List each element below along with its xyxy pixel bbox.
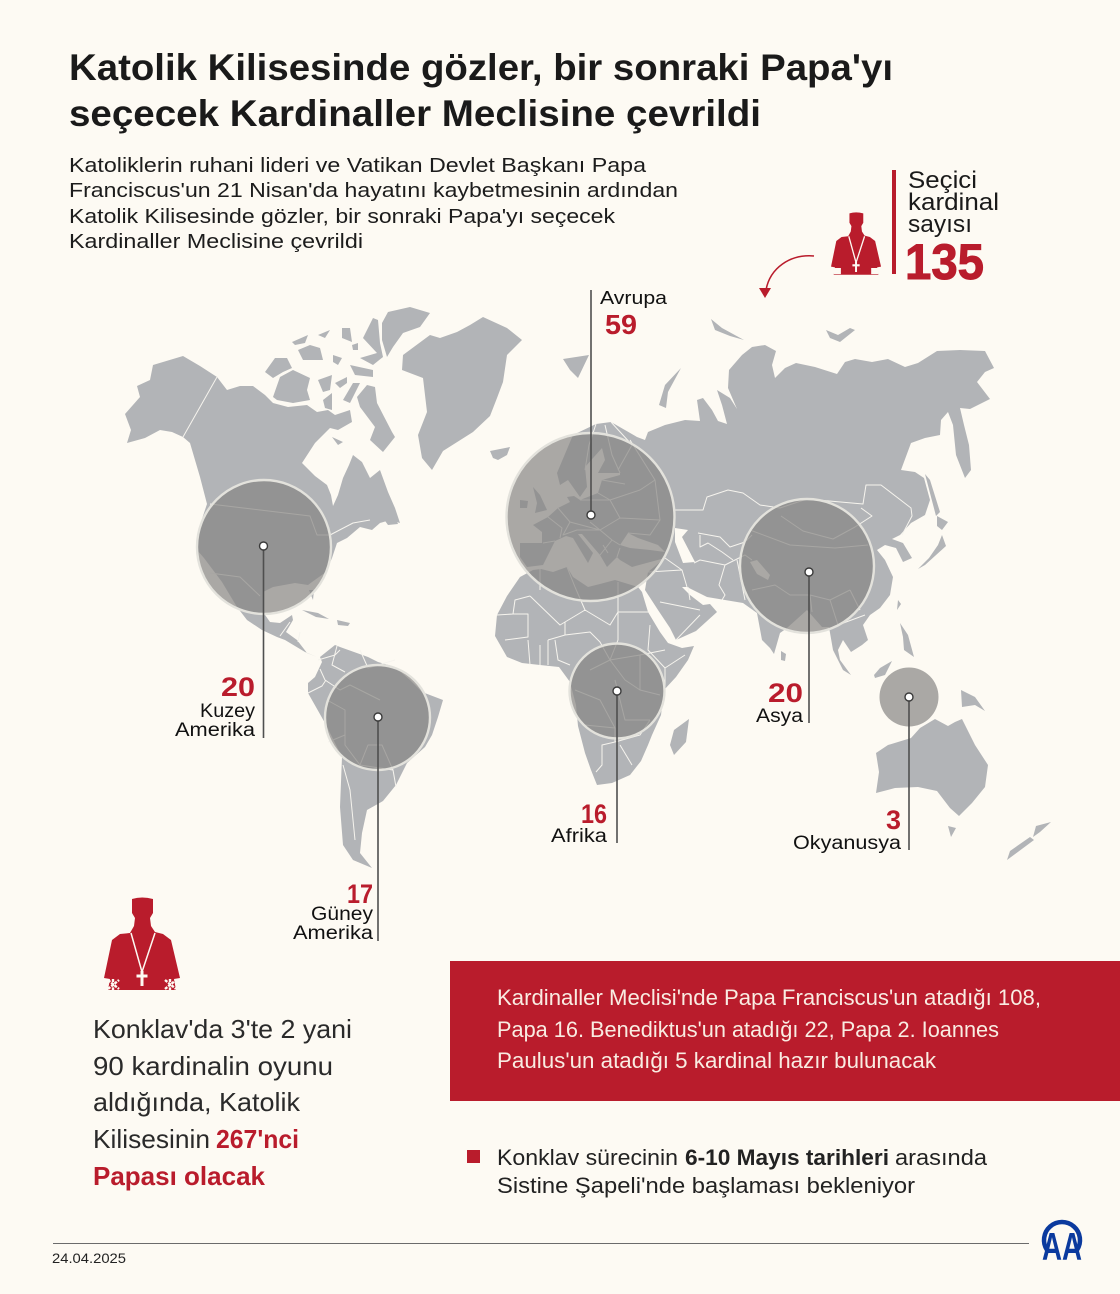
icon: cardinal, small [831,212,881,275]
text block: konklav two-thirds: Konklav'da 3'te 2 yani [93,1014,352,1044]
bubble: Avrupa [506,433,674,601]
landmass: South-East Asia islands [781,600,914,678]
inland seas [620,528,770,580]
landmass: northern Eurasian islands [563,319,855,408]
landmass: New Guinea, Tasmania and New Zealand [948,690,1051,860]
world map [125,307,1051,868]
total number: 135 [905,234,984,290]
label: Afrika 16 [551,687,621,847]
text block: konklav two-thirds: aldığında, Katolik [93,1087,301,1117]
bullet: conclave dates: Konklav sürecinin [497,1145,678,1170]
label: Kuzey Amerika 20 [175,542,268,741]
text block: konklav two-thirds [93,1014,352,1191]
heading text [908,167,999,238]
bullet: conclave dates: 6-10 Mayıs tarihleri [685,1145,889,1170]
panel: red box [450,961,1120,1101]
label: Avrupa 59: 59 [605,309,637,340]
bubble: Güney Amerika [325,665,430,770]
intro paragraph: Katoliklerin ruhani lideri ve Vatikan Devlet Başkanı Papa [69,154,647,177]
red divider bar [892,170,896,274]
label: Avrupa 59: Avrupa [600,287,668,308]
landmass: Caribbean islands and Florida [302,590,350,626]
landmass: Greenland [402,317,522,470]
label: Güney Amerika 17: Güney [311,904,374,925]
landmass: Australia [876,719,988,816]
Black Sea [620,533,665,552]
label: Avrupa 59 [587,287,668,519]
text block: konklav two-thirds: Kilisesinin [93,1124,210,1154]
bullet: conclave dates [467,1145,988,1198]
landmass: Africa [495,567,694,785]
landmass: Japan and Sakhalin [918,474,948,569]
landmass: Iceland [490,447,510,460]
logo: AA: AA [1042,1226,1082,1269]
country borders [183,377,912,840]
icon: cardinal, large [104,898,180,990]
landmass: Madagascar [670,719,689,755]
panel: continent bubbles [197,433,938,770]
panel: red box: Kardinaller Meclisi'nde Papa Franciscus'un atadığı 108, [497,985,1041,1010]
intro paragraph: Kardinaller Meclisine çevrildi [69,230,363,253]
text block: konklav two-thirds: 267'nci [216,1124,299,1154]
landmass: British Isles [520,487,547,513]
panel: red box: Paulus'un atadığı 5 kardinal hazır bulunacak [497,1048,937,1073]
title: seçecek Kardinaller Meclisine çevrildi [69,93,761,134]
label: Asya 20: 20 [768,678,803,708]
title: Katolik Kilisesinde gözler, bir sonraki Papa'yı [69,47,893,88]
label: Kuzey Amerika 20: 20 [221,672,255,702]
landmass: Eurasia [520,345,994,675]
intro paragraph [69,154,678,253]
bubble: Afrika [570,644,664,738]
intro paragraph: Franciscus'un 21 Nisan'da hayatını kaybetmesinin ardından [69,179,678,202]
label: Kuzey Amerika 20: Kuzey [200,701,256,722]
bubble: Okyanusya [880,668,938,726]
bullet: conclave dates: arasında [895,1145,988,1170]
Himalayan light patch [750,560,770,580]
bullet: conclave dates: Sistine Şapeli'nde başlaması bekleniyor [497,1173,915,1198]
label: Asya 20: Asya [756,706,803,727]
label: Güney Amerika 17 [293,713,382,944]
landmass: North America [125,356,400,657]
label: Afrika 16: Afrika [551,826,607,847]
landmass: Arctic islands [265,307,430,525]
footer rule and date: 24.04.2025 [52,1250,126,1266]
intro paragraph: Katolik Kilisesinde gözler, bir sonraki Papa'yı seçecek [69,205,616,228]
arrow [759,256,814,298]
text block: konklav two-thirds: 90 kardinalin oyunu [93,1051,333,1081]
text block: konklav two-thirds: Papası olacak [93,1161,266,1191]
heading text: kardinal [908,189,999,216]
Caspian Sea [675,528,695,563]
landmass: South America [308,645,443,868]
label: Asya 20 [756,568,813,727]
title [69,47,893,134]
heading text: sayısı [908,211,972,238]
callout: Seçici kardinal sayısı 135 [831,167,999,290]
label: Güney Amerika 17: Amerika [293,923,373,944]
logo: AA [1042,1222,1082,1269]
bubble: Asya [740,499,874,633]
panel: red box: Papa 16. Benediktus'un atadığı 22, Papa 2. Ioannes [497,1017,999,1042]
label: Kuzey Amerika 20: Amerika [175,720,255,741]
label: Okyanusya 3 [793,693,913,854]
label: Afrika 16: 16 [581,799,607,829]
bubble: Kuzey Amerika [197,480,331,614]
label: Güney Amerika 17: 17 [347,879,373,909]
label: Okyanusya 3: 3 [886,805,901,835]
heading text: Seçici [908,167,977,194]
label: Okyanusya 3: Okyanusya [793,833,901,854]
